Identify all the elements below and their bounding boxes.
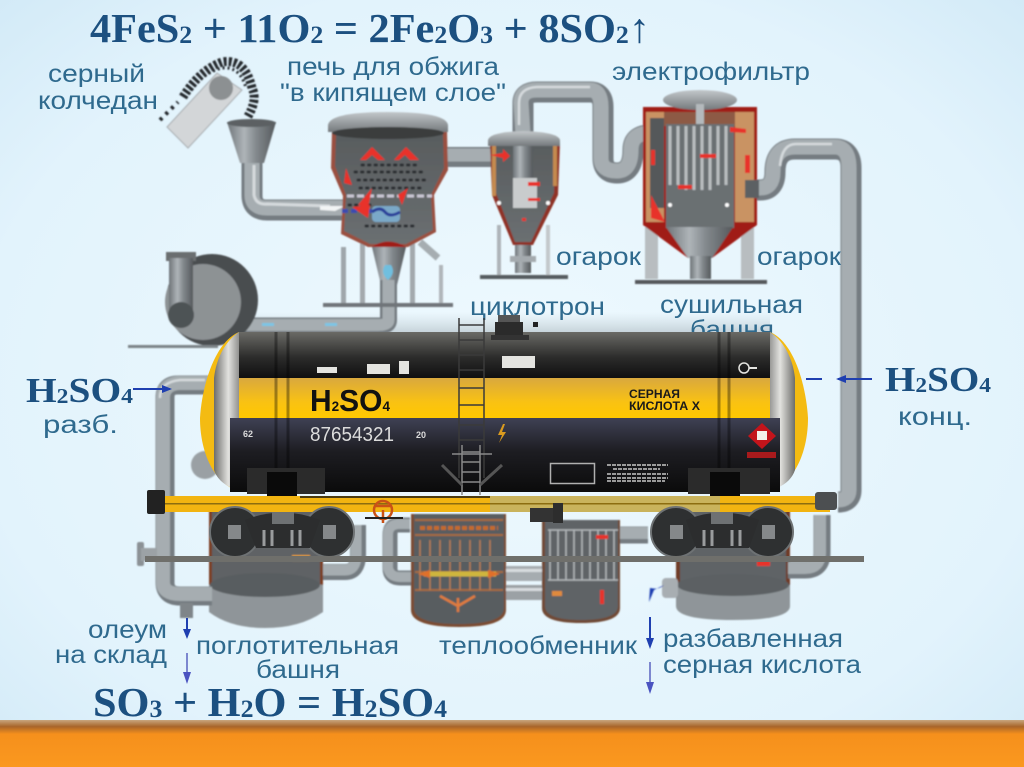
panel: absorption tower [209, 510, 358, 628]
tank right cap [768, 332, 808, 490]
top reaction formula: 2 [616, 22, 629, 49]
underframe [147, 490, 837, 523]
label: drying tower: сушильная [660, 291, 803, 319]
label: oleum: олеум [88, 616, 167, 644]
ladder [442, 318, 502, 495]
label: absorption tower: поглотительная [196, 632, 399, 660]
bottom reaction formula: 2 [241, 696, 254, 723]
tank upper band [239, 332, 770, 378]
top reaction formula: 2 [434, 22, 447, 49]
label: concentrated acid formula: H [885, 360, 912, 399]
tank left cap [200, 332, 240, 490]
icon: hopper and feed pipe [227, 119, 345, 211]
tank straps [276, 332, 729, 492]
tank text: small codes: 20 [416, 430, 426, 440]
plate text lines [607, 465, 668, 481]
label: cinder 1: огарок [556, 243, 642, 271]
label: dilute acid formula: H [26, 371, 53, 410]
label: drying tower second line: башня [690, 316, 774, 344]
label: electrofilter: электрофильтр [612, 58, 810, 86]
bottom reaction formula: 3 [149, 696, 162, 723]
tank text: sulfuric acid: СЕРНАЯ [629, 389, 680, 401]
panel: drying tower pipes [388, 524, 648, 600]
label: dilute acid formula: 4 [121, 384, 134, 408]
tank text: sulfuric acid: КИСЛОТА Х [629, 401, 700, 413]
icon: brake wheel [365, 501, 403, 523]
tank text: sulfuric acid [629, 389, 700, 413]
wheels right bogie [651, 507, 793, 557]
top reaction formula: 3 [480, 22, 493, 49]
arrow: diluted acid 2 [646, 662, 654, 694]
top reaction formula: 2 [310, 22, 323, 49]
tank text: number: 87654321 [310, 424, 394, 446]
label: to storage: на склад [55, 641, 167, 669]
icon: manway [491, 315, 538, 340]
label: absorption tower second line: башня [256, 656, 340, 684]
bottom reaction formula: SO [93, 679, 148, 725]
icon: pyrite feed chute [160, 62, 254, 148]
label: heat exchanger: теплообменник [439, 632, 638, 660]
label: dilute acid formula: SO [69, 371, 121, 410]
label: sulfuric acid: серная кислота [663, 651, 861, 679]
top reaction formula: O [447, 5, 480, 51]
panel: electrostatic filter [635, 90, 851, 502]
label: concentrated acid formula: 2 [915, 373, 927, 397]
rail [145, 556, 864, 562]
tank lower band [230, 418, 780, 492]
label: furnace second line: "в кипящем слое" [280, 79, 506, 107]
orange footer band [0, 720, 1024, 767]
panel: rail tank car [145, 315, 864, 562]
plate rectangle [550, 464, 594, 484]
top reaction formula: = 2Fe [323, 5, 434, 51]
panel: fluidized-bed furnace [240, 112, 492, 326]
panel: last tower [649, 510, 822, 620]
bottom reaction formula: 2 [365, 696, 378, 723]
panel: left return pipe [137, 380, 219, 618]
panel: cyclone [480, 87, 650, 279]
arrow: diluted acid 1 [646, 617, 654, 649]
icon: hazard diamond [747, 423, 776, 458]
tank placards [317, 356, 757, 374]
tank yellow band [239, 378, 770, 418]
bottom reaction formula: + H [162, 679, 241, 725]
bottom reaction formula: 4 [434, 696, 448, 723]
process equipment [128, 62, 851, 628]
bottom reaction formula: SO [378, 679, 434, 725]
arrow: oleum 2 [183, 653, 191, 684]
arrow: acid inlet [133, 385, 172, 393]
label: dilute: разб. [43, 411, 118, 439]
wheels left bogie [210, 507, 354, 557]
icon: air blower [128, 252, 337, 348]
label: concentrated acid formula: 4 [979, 373, 992, 397]
panel: heat exchanger [542, 520, 620, 623]
label: pyrite second line: колчедан [38, 87, 158, 115]
icon: lightning [498, 424, 506, 443]
label: pyrite: серный [48, 60, 145, 88]
arrow: concentrated acid [806, 375, 872, 383]
top reaction formula: 4FeS [90, 5, 177, 51]
label: cinder 2: огарок [757, 243, 842, 271]
top reaction formula: + 8SO [493, 5, 616, 51]
top reaction formula: ↑ [629, 5, 650, 51]
panel: drying tower [411, 514, 506, 627]
label: dilute acid formula: 2 [57, 384, 69, 408]
label: concentrated: конц. [898, 403, 972, 431]
label: diluted: разбавленная [663, 625, 843, 653]
label: cyclotron: циклотрон [470, 293, 605, 321]
bottom reaction formula: O = H [254, 679, 365, 725]
tank text: formula: H2SO4 [310, 383, 390, 418]
arrow: oleum 1 [183, 618, 191, 639]
bogie bolsters [247, 468, 770, 497]
label: concentrated acid formula: SO [927, 360, 979, 399]
top reaction formula: + 11O [192, 5, 310, 51]
top reaction formula: 2 [179, 22, 192, 49]
tank text: small codes: 62 [243, 429, 253, 439]
tank text: small codes [243, 429, 426, 440]
label: furnace: печь для обжига [287, 53, 499, 81]
